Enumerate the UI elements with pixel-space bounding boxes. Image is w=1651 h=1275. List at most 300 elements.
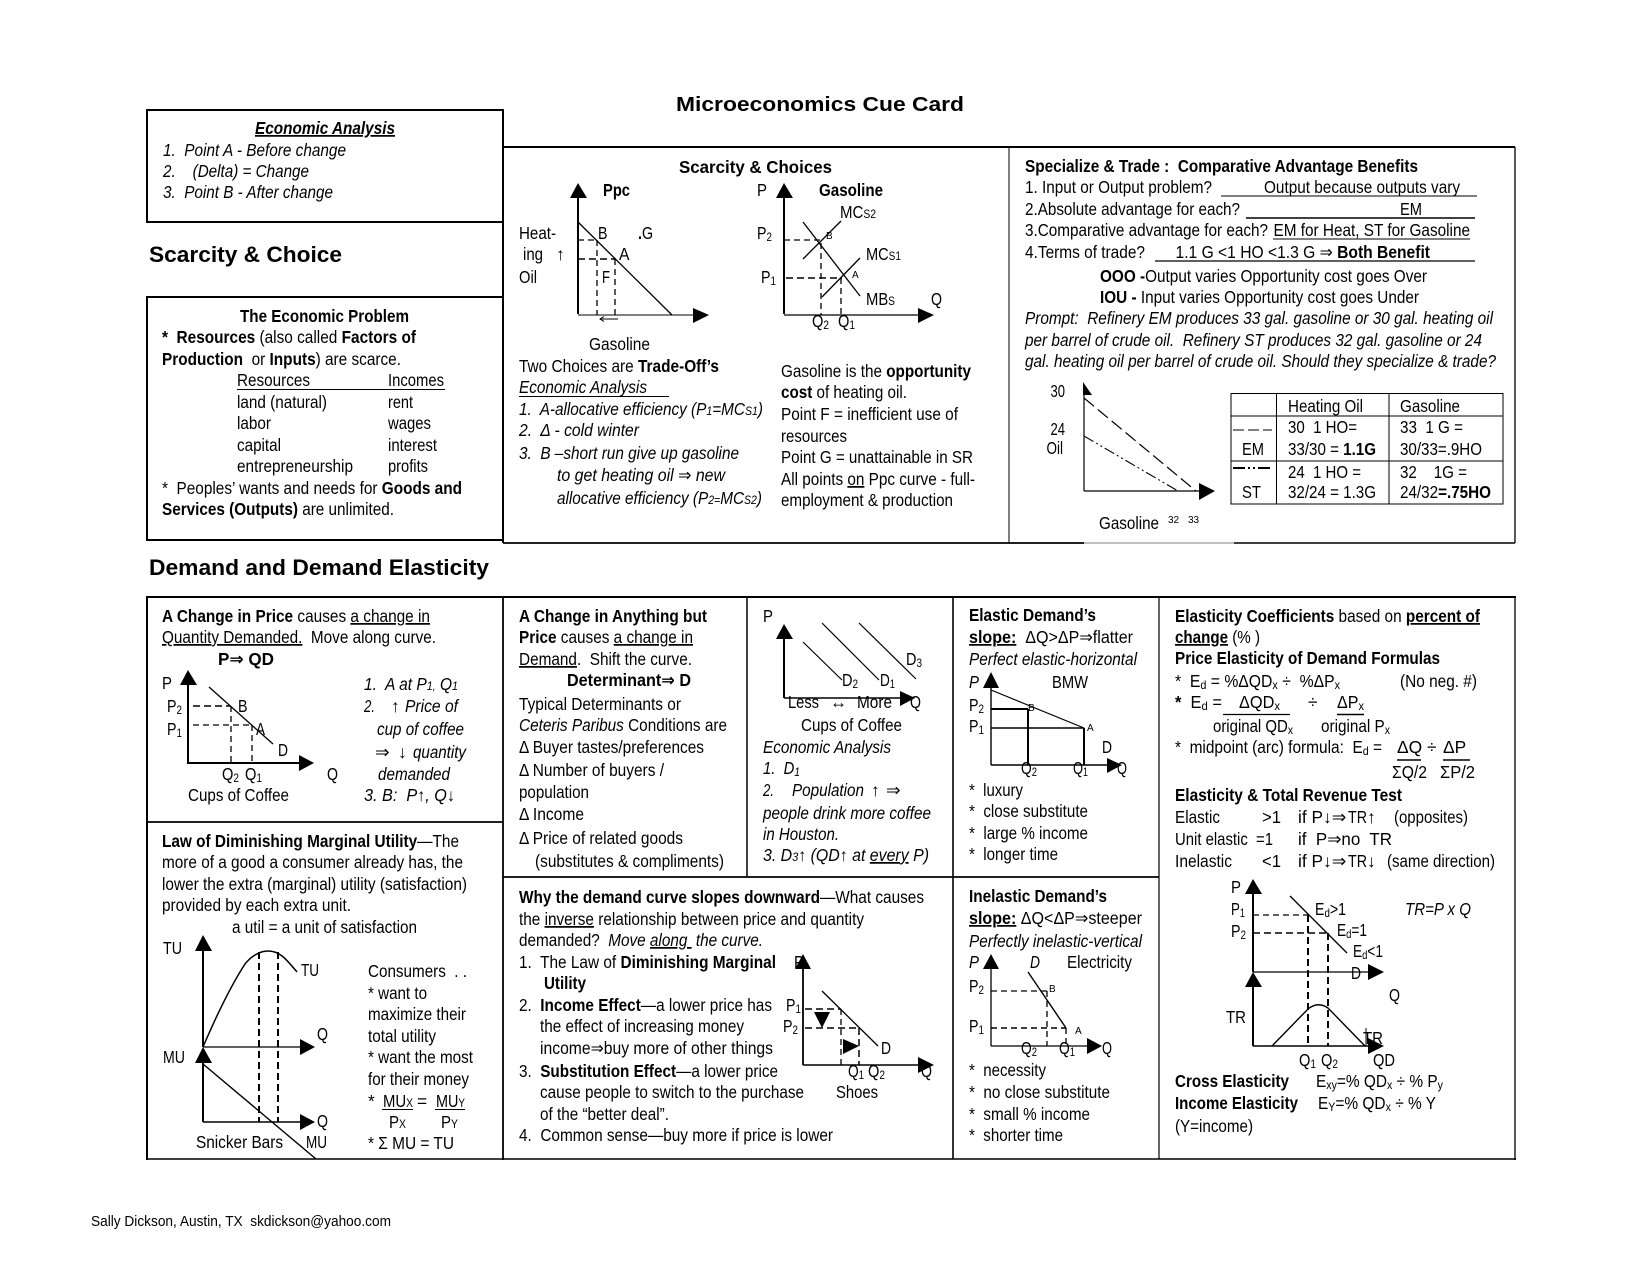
chart: total revenue [1226, 972, 1395, 1071]
chart: elastic demand: Q [1117, 758, 1127, 778]
panel: change in anything but price: Δ Buyer tastes/preferences [519, 737, 704, 757]
chart: total utility: TU [163, 938, 182, 958]
chart: elastic demand: 2 [979, 702, 984, 716]
chart: total utility: TU [301, 960, 319, 980]
downward slope text: cause people to switch to the purchase [540, 1082, 804, 1102]
economic analysis steps: 1. Point A - Before change [163, 140, 346, 160]
price change analysis: cup of coffee [377, 719, 464, 739]
chart: demand shift: D [880, 670, 893, 690]
chart: shoes demand: 2 [879, 1068, 885, 1082]
consumers text: PY [441, 1112, 458, 1132]
chart: elastic demand: Q [1021, 758, 1035, 778]
chart: inelastic demand: 1 [979, 1023, 984, 1037]
elastic traits: * luxury [969, 780, 1023, 800]
chart: oil and gasoline production: Gasoline [1099, 513, 1159, 533]
trade-offs text: Economic Analysis [519, 377, 647, 397]
inelastic traits: * no close substitute [969, 1082, 1110, 1102]
opportunity cost text: All points on Ppc curve - full- [781, 469, 975, 489]
chart: movement along demand: 2 [177, 703, 182, 717]
resources and incomes table: labor [237, 413, 271, 433]
chart: demand shift: Less [788, 692, 819, 712]
chart: shoes demand: P [783, 1016, 795, 1036]
price elasticity formulas: d [1200, 678, 1206, 692]
chart: ppc: .G [638, 223, 653, 243]
panel: law of diminishing marginal utility [162, 831, 473, 1159]
change in price text: P⇒ QD [218, 649, 274, 669]
chart: price and demand elasticity: P [1231, 921, 1243, 941]
demand shift analysis: 1 [794, 765, 800, 779]
price elasticity formulas: ΣP/2 [1440, 762, 1475, 782]
chart: inelastic demand: D [1030, 952, 1040, 972]
questions: Output because outputs vary [1264, 177, 1460, 197]
chart: total revenue: 1 [1310, 1057, 1316, 1071]
chart: movement along demand: A [256, 719, 265, 739]
chart: ppc: A [619, 244, 630, 264]
economic analysis steps: 2. (Delta) = Change [162, 161, 309, 181]
chart: demand shift [763, 606, 922, 735]
resources text [162, 327, 416, 369]
chart: gasoline market: MCS1 [866, 244, 901, 264]
price elasticity formulas: ΔP [1443, 737, 1466, 757]
coefficient heading: Elasticity Coefficients based on percent of [1175, 606, 1480, 626]
price elasticity formulas: ΔQ [1397, 737, 1422, 757]
chart: price and demand elasticity: 1 [1240, 906, 1245, 920]
downward slope text: the inverse relationship between price and quantity [519, 909, 864, 929]
price elasticity formulas: ΔP [1337, 692, 1360, 712]
prompt: Prompt: Refinery EM produces 33 gal. gasoline or 30 gal. heating oil [1025, 308, 1494, 328]
price elasticity formulas: ΔQD [1239, 692, 1277, 712]
panel: change in anything but price: Demand. Shift the curve. [519, 649, 692, 669]
change in price text [162, 606, 436, 669]
chart: movement along demand: 2 [233, 771, 239, 785]
chart: demand shift: D [906, 649, 919, 669]
chart: inelastic demand: 2 [1032, 1045, 1037, 1059]
chart: price and demand elasticity: d [1362, 948, 1367, 962]
chart: movement along demand: P [167, 696, 179, 716]
inelastic traits: * small % income [969, 1104, 1090, 1124]
inelastic traits: * shorter time [969, 1125, 1063, 1145]
price elasticity formulas [1175, 671, 1477, 782]
cross and income elasticity: Income Elasticity [1175, 1093, 1298, 1113]
opportunity cost text: cost of heating oil. [781, 382, 907, 402]
utility text: more of a good a consumer already has, the [162, 852, 463, 872]
cross and income elasticity: ÷ % Y [1391, 1093, 1436, 1113]
cross and income elasticity: ÷ % P [1392, 1071, 1438, 1091]
chart: gasoline market: MCS2 [840, 202, 876, 222]
formula: total revenue: TR=P x Q [1405, 899, 1471, 919]
chart: gasoline market: 1 [771, 274, 776, 288]
mnemonics [1100, 266, 1427, 307]
chart: demand shift: ↔ [830, 692, 847, 712]
chart: total revenue: Q [1321, 1050, 1335, 1070]
economic problem heading: The Economic Problem [240, 306, 409, 326]
price change analysis: Price of [405, 696, 460, 716]
questions: 4.Terms of trade? [1025, 242, 1145, 262]
consumers text: maximize their [368, 1004, 466, 1024]
chart: total utility: Q [317, 1024, 328, 1044]
price elasticity formulas: d [1202, 699, 1208, 713]
chart: elastic demand: Q [1073, 758, 1087, 778]
wants and needs text: * Peoples’ wants and needs for Goods and [162, 478, 462, 498]
chart: ppc [519, 180, 709, 354]
panel: change in anything but price: Δ Income [519, 804, 584, 824]
trade-offs text: allocative efficiency (P2=MCS2) [557, 488, 762, 508]
chart: movement along demand: 1 [177, 726, 182, 740]
cross and income elasticity: x [1386, 1100, 1391, 1114]
total revenue test: if P⇒no TR [1298, 829, 1392, 849]
chart: demand shift: 2 [852, 677, 858, 691]
chart: inelastic demand: Q [1102, 1038, 1112, 1058]
chart: demand shift: 1 [890, 677, 895, 691]
total revenue test: if P [1298, 851, 1323, 871]
change in price text: Quantity Demanded. Move along curve. [162, 627, 436, 647]
resources and incomes table: Resources [237, 370, 310, 390]
opportunity cost text: employment & production [781, 490, 953, 510]
chart: inelastic demand: B [1049, 984, 1056, 995]
total revenue test [1175, 785, 1495, 871]
total revenue test: ↓⇒ [1323, 807, 1346, 827]
wants and needs text: Services (Outputs) are unlimited. [162, 499, 394, 519]
chart: gasoline market: 1 [849, 318, 855, 332]
chart: elastic demand: P [969, 695, 981, 715]
demand shift analysis: ⇒ [886, 780, 901, 800]
questions [1025, 177, 1477, 262]
table: opportunity costs: 24 1 HO = [1288, 462, 1361, 482]
price elasticity formulas: x [1274, 699, 1280, 713]
chart: ppc: F [602, 267, 610, 287]
price elasticity formulas: = [1369, 737, 1382, 757]
questions: EM for Heat, ST for Gasoline [1274, 220, 1470, 240]
chart: demand shift: P [763, 606, 773, 626]
price change analysis: ↑ [391, 696, 400, 716]
chart: demand shift: Cups of Coffee [801, 715, 902, 735]
coefficient heading [1175, 606, 1480, 668]
panel: economic analysis [147, 110, 503, 222]
prompt: gal. heating oil per barrel of crude oil. Should they specialize & trade? [1025, 351, 1496, 371]
price change analysis: demanded [378, 764, 451, 784]
chart: total revenue: Q [1299, 1050, 1313, 1070]
chart: gasoline market: Gasoline [819, 180, 883, 200]
chart: shoes demand: 1 [796, 1002, 801, 1016]
resources and incomes table: wages [387, 413, 431, 433]
price change analysis: 1. A at P1, Q1 [364, 674, 458, 694]
price elasticity formulas: d [1363, 744, 1369, 758]
opportunity cost text [781, 361, 975, 510]
chart: elastic demand: 1 [1083, 765, 1088, 779]
chart: shoes demand: D [881, 1038, 891, 1058]
panel: change in anything but price: population [519, 782, 589, 802]
total revenue test: Inelastic [1175, 851, 1232, 871]
table: opportunity costs: 33/30 = 1.1G [1288, 439, 1376, 459]
chart: inelastic demand: Q [1021, 1038, 1035, 1058]
panel: elastic demand [969, 605, 1138, 864]
price elasticity formulas: = [1208, 692, 1222, 712]
downward slope text: 3. Substitution Effect—a lower price [519, 1061, 778, 1081]
total revenue test: <1 [1262, 851, 1281, 871]
consumers text: Consumers . . [368, 961, 467, 981]
price change analysis: ↓ [398, 742, 407, 762]
chart: shoes demand: Q [868, 1061, 882, 1081]
cross and income elasticity: xy [1326, 1078, 1337, 1092]
chart: price and demand elasticity: =1 [1351, 920, 1367, 940]
chart: elastic demand: B [1028, 703, 1035, 714]
chart: price and demand elasticity: P [1231, 899, 1243, 919]
consumers text: for their money [368, 1069, 469, 1089]
chart: gasoline market: Q [812, 311, 826, 331]
downward slope text: 1. The Law of Diminishing Marginal [519, 952, 776, 972]
chart: shoes demand: 1 [859, 1068, 864, 1082]
chart: movement along demand: Q [327, 764, 338, 784]
chart: elastic demand: P [969, 672, 979, 692]
panel: the economic problem [147, 297, 503, 540]
chart: marginal utility: Snicker Bars [196, 1132, 283, 1152]
consumers text: * [368, 1091, 375, 1111]
chart: total utility [163, 935, 328, 1122]
table: opportunity costs [1231, 393, 1503, 504]
chart: movement along demand: Q [245, 764, 259, 784]
demand shift analysis: ↑ [871, 780, 880, 800]
panel: change in anything but price: Δ Price of related goods [519, 828, 683, 848]
chart: shoes demand: Q [921, 1061, 932, 1081]
price elasticity formulas: * E [1175, 671, 1203, 691]
demand shift analysis: in Houston. [763, 824, 839, 844]
demand shift analysis: 2. [762, 780, 774, 800]
chart: inelastic demand: 2 [979, 983, 984, 997]
price elasticity formulas: ÷ %ΔP [1278, 671, 1335, 691]
chart: total revenue: QD [1373, 1050, 1395, 1070]
panel: change in anything but price: Determinant⇒ D [567, 670, 691, 690]
chart: ppc: B [598, 223, 608, 243]
demand shift analysis [762, 737, 931, 865]
total revenue test: (same direction) [1387, 851, 1495, 871]
chart: demand shift: More [857, 692, 892, 712]
table: opportunity costs: 30 1 HO= [1288, 417, 1357, 437]
chart: gasoline market: Q [838, 311, 852, 331]
consumers text: MUX [383, 1091, 413, 1111]
chart: marginal utility: MU [163, 1047, 185, 1067]
trade-offs text [518, 356, 763, 508]
mnemonics: OOO -Output varies Opportunity cost goes Over [1100, 266, 1427, 286]
title: Microeconomics Cue Card [676, 93, 964, 116]
chart: inelastic demand: A [1075, 1026, 1082, 1037]
trade-offs text: to get heating oil ⇒ new [557, 465, 726, 485]
consumers text: * want to [368, 983, 427, 1003]
chart: oil and gasoline production: 24 [1050, 419, 1065, 439]
questions: EM [1400, 199, 1422, 219]
prompt: per barrel of crude oil. Refinery ST produces 32 gal. gasoline or 24 [1024, 330, 1482, 350]
elastic traits: * close substitute [969, 801, 1088, 821]
total revenue test: Elastic [1175, 807, 1220, 827]
scarcity and choices heading: Scarcity & Choices [679, 157, 832, 177]
economic analysis steps [162, 140, 346, 202]
price elasticity formulas: x [1288, 723, 1293, 737]
chart: demand shift: 3 [916, 656, 922, 670]
utility text [162, 831, 467, 937]
economic analysis steps: 3. Point B - After change [163, 182, 333, 202]
panel: change in anything but price: Price causes a change in [519, 627, 693, 647]
resources text: * Resources (also called Factors of [162, 327, 416, 347]
questions: 2.Absolute advantage for each? [1025, 199, 1240, 219]
downward slope text: income⇒buy more of other things [540, 1038, 773, 1058]
specialize heading: Specialize & Trade : Comparative Advantage Benefits [1025, 156, 1418, 176]
chart: price and demand elasticity: d [1346, 927, 1351, 941]
chart: gasoline market: A [852, 270, 859, 281]
consumers text: = [417, 1091, 427, 1111]
prompt [1024, 308, 1496, 371]
elastic traits: * large % income [969, 823, 1088, 843]
cross and income elasticity: Cross Elasticity [1175, 1071, 1289, 1091]
questions: 1.1 G <1 HO <1.3 G ⇒ Both Benefit [1176, 242, 1430, 262]
price elasticity formulas: ΣQ/2 [1392, 762, 1427, 782]
table: opportunity costs: 30/33=.9HO [1400, 439, 1482, 459]
resources and incomes table: land (natural) [237, 392, 327, 412]
price elasticity formulas: x [1358, 699, 1364, 713]
total revenue test: (opposites) [1394, 807, 1468, 827]
utility text: lower the extra (marginal) utility (satisfaction) [162, 874, 467, 894]
total revenue test: >1 [1262, 807, 1281, 827]
total revenue test: Elasticity & Total Revenue Test [1175, 785, 1402, 805]
price elasticity formulas: x [1385, 723, 1390, 737]
chart: shoes demand [783, 952, 934, 1102]
price elasticity formulas: x [1335, 678, 1340, 692]
downward slope text: Utility [544, 973, 586, 993]
price elasticity formulas: original P [1321, 716, 1394, 736]
resources text: Production or Inputs) are scarce. [162, 349, 401, 369]
chart: gasoline market: P [757, 180, 767, 200]
chart: demand shift: D [842, 670, 855, 690]
elastic traits: * longer time [969, 844, 1058, 864]
table: opportunity costs: 32 1G = [1400, 462, 1467, 482]
trade-offs text: 1. A-allocative efficiency (P1=MCS1) [519, 399, 763, 419]
chart: ppc: ing [523, 244, 543, 264]
trade-offs text: 2. Δ - cold winter [518, 420, 640, 440]
panel: inelastic demand [969, 886, 1143, 1145]
chart: price and demand elasticity [1231, 877, 1400, 1046]
chart: price and demand elasticity: 2 [1241, 928, 1246, 942]
price change analysis: 2. [363, 696, 375, 716]
trade-offs text: 3. B –short run give up gasoline [519, 443, 739, 463]
price elasticity formulas: * E [1175, 692, 1203, 712]
chart: price and demand elasticity: E [1315, 899, 1327, 919]
consumers text: PX [389, 1112, 406, 1132]
consumers text: total utility [368, 1026, 436, 1046]
chart: elastic demand: BMW [1052, 672, 1088, 692]
resources and incomes table: capital [237, 435, 281, 455]
cross and income elasticity: (Y=income) [1175, 1116, 1253, 1136]
downward slope text: demanded? Move along the curve. [519, 930, 763, 950]
downward slope text: the effect of increasing money [540, 1016, 744, 1036]
panel: change in anything but price: A Change in Anything but [519, 606, 707, 626]
chart: movement along demand: 1 [256, 771, 262, 785]
consumers text: * want the most [368, 1047, 473, 1067]
downward slope text: 2. Income Effect—a lower price has [519, 995, 772, 1015]
chart: demand shift: Q [910, 692, 921, 712]
chart: price and demand elasticity: P [1231, 877, 1241, 897]
chart: inelastic demand: Q [1059, 1038, 1073, 1058]
price elasticity formulas: ÷ [1308, 692, 1318, 712]
demand shift analysis: 3. D3↑ (QD↑ at every P) [763, 845, 929, 865]
chart: price and demand elasticity: >1 [1330, 899, 1346, 919]
chart: shoes demand: Q [848, 1061, 862, 1081]
table: opportunity costs: 32/24 = 1.3G [1288, 482, 1376, 502]
chart: oil and gasoline production: 32 [1168, 515, 1180, 526]
price change analysis: 3. B: P↑, Q↓ [364, 785, 455, 805]
price elasticity formulas: x [1272, 678, 1278, 692]
price change analysis [363, 674, 467, 805]
chart: gasoline market: P [757, 223, 769, 243]
chart: elastic demand: D [1102, 737, 1112, 757]
utility text: Law of Diminishing Marginal Utility—The [162, 831, 459, 851]
table: opportunity costs: 33 1 G = [1400, 417, 1463, 437]
table: opportunity costs: ST [1242, 482, 1261, 502]
panel: inelastic demand: Perfectly inelastic-vertical [969, 931, 1143, 951]
cross and income elasticity: Y [1328, 1100, 1335, 1114]
panel: specialize and trade [1024, 147, 1515, 543]
chart: movement along demand: Q [222, 764, 236, 784]
questions: 3.Comparative advantage for each? [1025, 220, 1268, 240]
chart: oil and gasoline production: Oil [1046, 438, 1063, 458]
elastic traits [969, 780, 1088, 864]
chart: inelastic demand [969, 952, 1132, 1059]
table: opportunity costs: Gasoline [1400, 396, 1460, 416]
price elasticity formulas: (No neg. #) [1400, 671, 1477, 691]
cross and income elasticity: y [1438, 1078, 1443, 1092]
panel: elastic demand: Elastic Demand’s [969, 605, 1096, 625]
resources and incomes table: interest [388, 435, 437, 455]
panel: change in anything but price [519, 606, 727, 871]
chart: movement along demand [162, 670, 338, 805]
cross and income elasticity [1175, 1071, 1443, 1136]
resources and incomes table: entrepreneurship [237, 456, 353, 476]
chart: marginal utility: MU [306, 1132, 327, 1152]
chart: ppc: Oil [519, 267, 537, 287]
chart: price and demand elasticity: E [1337, 920, 1349, 940]
resources and incomes table: profits [388, 456, 428, 476]
chart: inelastic demand: P [969, 1016, 981, 1036]
demand shift analysis: Population [792, 780, 864, 800]
price elasticity formulas: = %ΔQD [1206, 671, 1272, 691]
opportunity cost text: resources [781, 426, 847, 446]
table: opportunity costs: 24/32=.75HO [1400, 482, 1491, 502]
chart: movement along demand: P [167, 719, 179, 739]
chart: movement along demand: B [238, 696, 248, 716]
chart: total revenue: TR [1226, 1007, 1246, 1027]
consumers text: * Σ MU = TU [368, 1133, 454, 1153]
table: opportunity costs: EM [1242, 439, 1264, 459]
chart: oil and gasoline production: 30 [1050, 381, 1065, 401]
chart: gasoline market: 2 [767, 230, 772, 244]
panel: change in price [162, 606, 467, 805]
chart: total revenue: TR [1363, 1028, 1383, 1048]
panel: inelastic demand: slope: ΔQ<ΔP⇒steeper [969, 908, 1142, 928]
chart: gasoline market: B [826, 231, 833, 242]
chart: price and demand elasticity: Q [1389, 985, 1400, 1005]
chart: gasoline market: P [761, 267, 773, 287]
chart: price and demand elasticity: D [1351, 963, 1361, 983]
chart: elastic demand: 2 [1032, 765, 1037, 779]
coefficient heading: Price Elasticity of Demand Formulas [1175, 648, 1440, 668]
cross and income elasticity: E [1318, 1093, 1330, 1113]
chart: ppc: Heat- [519, 223, 556, 243]
chart: gasoline market: Q [931, 289, 942, 309]
chart: elastic demand: P [969, 716, 981, 736]
total revenue test: ↓⇒ [1323, 851, 1346, 871]
panel: inelastic demand: Inelastic Demand’s [969, 886, 1107, 906]
chart: inelastic demand: 1 [1070, 1045, 1075, 1059]
chart: marginal utility: Q [317, 1111, 328, 1131]
chart: elastic demand [969, 672, 1127, 779]
cross and income elasticity: E [1316, 1071, 1328, 1091]
